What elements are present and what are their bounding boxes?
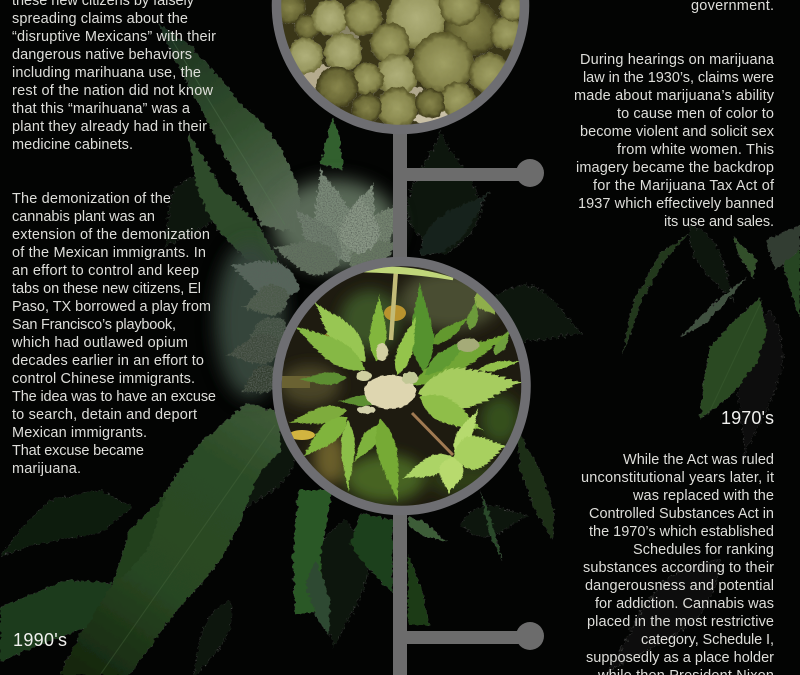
text block: left column, demonization: which had outlawed opium — [11, 335, 188, 351]
frosty central bud — [216, 162, 420, 405]
text block: right column, 1930's hearings: become violent and solicit sex — [580, 124, 775, 140]
branch connector: 1970's — [400, 622, 544, 650]
text block: left column, demonization: cannabis plant was an — [12, 209, 155, 225]
text block: left column, demonization: tabs on these new citizens, El — [12, 281, 201, 297]
text block: right column, Controlled Substances Act: dangerousness and potential — [585, 578, 774, 594]
second upper leaf — [188, 133, 280, 265]
text block: left column, marihuana claims: plant they already had in their — [12, 119, 207, 135]
right side leaves — [622, 233, 690, 357]
dark left leaf — [0, 490, 133, 557]
text block: right column, 1930's hearings: During hearings on marijuana — [580, 52, 775, 68]
text block: left column, marihuana claims: medicine cabinets. — [12, 137, 133, 153]
text block: right column, Controlled Substances Act: substances according to their — [583, 560, 774, 576]
text block: left column, marihuana claims: that this “marihuana” was a — [12, 101, 191, 117]
heading: 1990's: 1990's — [13, 630, 67, 650]
photo circle: flowering cannabis plant — [275, 260, 529, 514]
text block: left column, demonization: marijuana. — [12, 461, 81, 477]
text block: right column, Controlled Substances Act: placed in the most restrictive — [587, 614, 774, 630]
text block: left column, demonization: extension of the demonization — [12, 227, 210, 243]
text block: left column, demonization: The idea was to have an excuse — [12, 389, 216, 405]
text block: right column, 1930's hearings — [574, 52, 775, 230]
text block: left column, demonization: an effort to control and keep — [12, 263, 199, 279]
text block: right column, 1930's hearings: from white women. This — [617, 142, 774, 158]
text block: right column, 1930's hearings: law in the 1930’s, claims were — [583, 70, 774, 86]
text block: left column, demonization: Mexican immigrants. — [12, 425, 147, 441]
text block: right column, 1930's hearings: 1937 which effectively banned — [578, 196, 774, 212]
text block: right column, Controlled Substances Act: was replaced with the — [632, 488, 774, 504]
text block: right column, Controlled Substances Act — [581, 452, 774, 675]
text block: right column, Controlled Substances Act: category, Schedule I, — [641, 632, 774, 648]
text block: left column, demonization: Paso, TX borrowed a play from — [12, 299, 211, 315]
text block: left column, marihuana claims: spreading claims about the — [12, 11, 188, 27]
text block: right column, 1930's hearings: imagery became the backdrop — [576, 160, 774, 176]
text block: right column, Controlled Substances Act: While the Act was ruled — [623, 452, 774, 468]
branch connector: 1930's — [400, 159, 544, 187]
plant leaves — [286, 281, 526, 505]
text block: left column, demonization: of the Mexican immigrants. In — [12, 245, 206, 261]
text block: left column, marihuana claims: including marihuana use, the — [12, 65, 201, 81]
text block: right column, Controlled Substances Act: for addiction. Cannabis was — [595, 596, 774, 612]
leaf midribs — [100, 40, 762, 675]
text block: right column, 1930's hearings: to cause men of color to — [617, 106, 774, 122]
photo circle: dried cannabis buds — [270, 0, 532, 140]
text block: right column, Controlled Substances Act: supposedly as a place holder — [586, 650, 774, 666]
text block: right column, Controlled Substances Act: Schedules for ranking — [633, 542, 774, 558]
text block: right column, 1930's hearings: its use and sales. — [664, 214, 774, 230]
text block: right column, Controlled Substances Act: Controlled Substances Act in — [589, 506, 774, 522]
upper large leaf — [158, 23, 305, 235]
lower large leaf — [60, 403, 281, 675]
text block: left column, marihuana claims: dangerous native behaviors — [12, 47, 192, 63]
text block: left column, demonization — [11, 191, 216, 477]
photo backdrop patches — [280, 270, 520, 502]
text block: right column, 1930's hearings: for the Marijuana Tax Act of — [593, 178, 775, 194]
dim leaves behind — [142, 129, 792, 675]
text block: right column, Controlled Substances Act: unconstitutional years later, it — [581, 470, 774, 486]
timeline spine and branches — [393, 130, 544, 675]
stems — [391, 270, 396, 340]
text block: left column, demonization: San Francisco’s playbook, — [12, 317, 176, 333]
small top leaf — [320, 117, 343, 170]
text block: left column, demonization: The demonization of the — [12, 191, 171, 207]
leaves below flower circle — [293, 490, 332, 633]
text block: left column, demonization: to search, detain and deport — [12, 407, 197, 423]
central flower bud — [356, 338, 479, 414]
text block: left column, demonization: control Chinese immigrants. — [12, 371, 195, 387]
text block: right column, 1930's hearings: made about marijuana’s ability — [574, 88, 775, 104]
text block: left column, marihuana claims: “disruptive Mexicans” with their — [12, 29, 216, 45]
text block: left column, marihuana claims: rest of the nation did not know — [12, 83, 214, 99]
lower left leaf — [0, 580, 112, 662]
text block: right column, Controlled Substances Act: the 1970’s which established — [589, 524, 774, 540]
yellow flecks — [282, 305, 406, 440]
text block: left column, demonization: decades earlier in an effort to — [12, 353, 204, 369]
text block: left column, demonization: That excuse became — [12, 443, 144, 459]
text block: left column, marihuana claims — [12, 0, 216, 153]
heading: 1970's: 1970's — [721, 408, 774, 428]
